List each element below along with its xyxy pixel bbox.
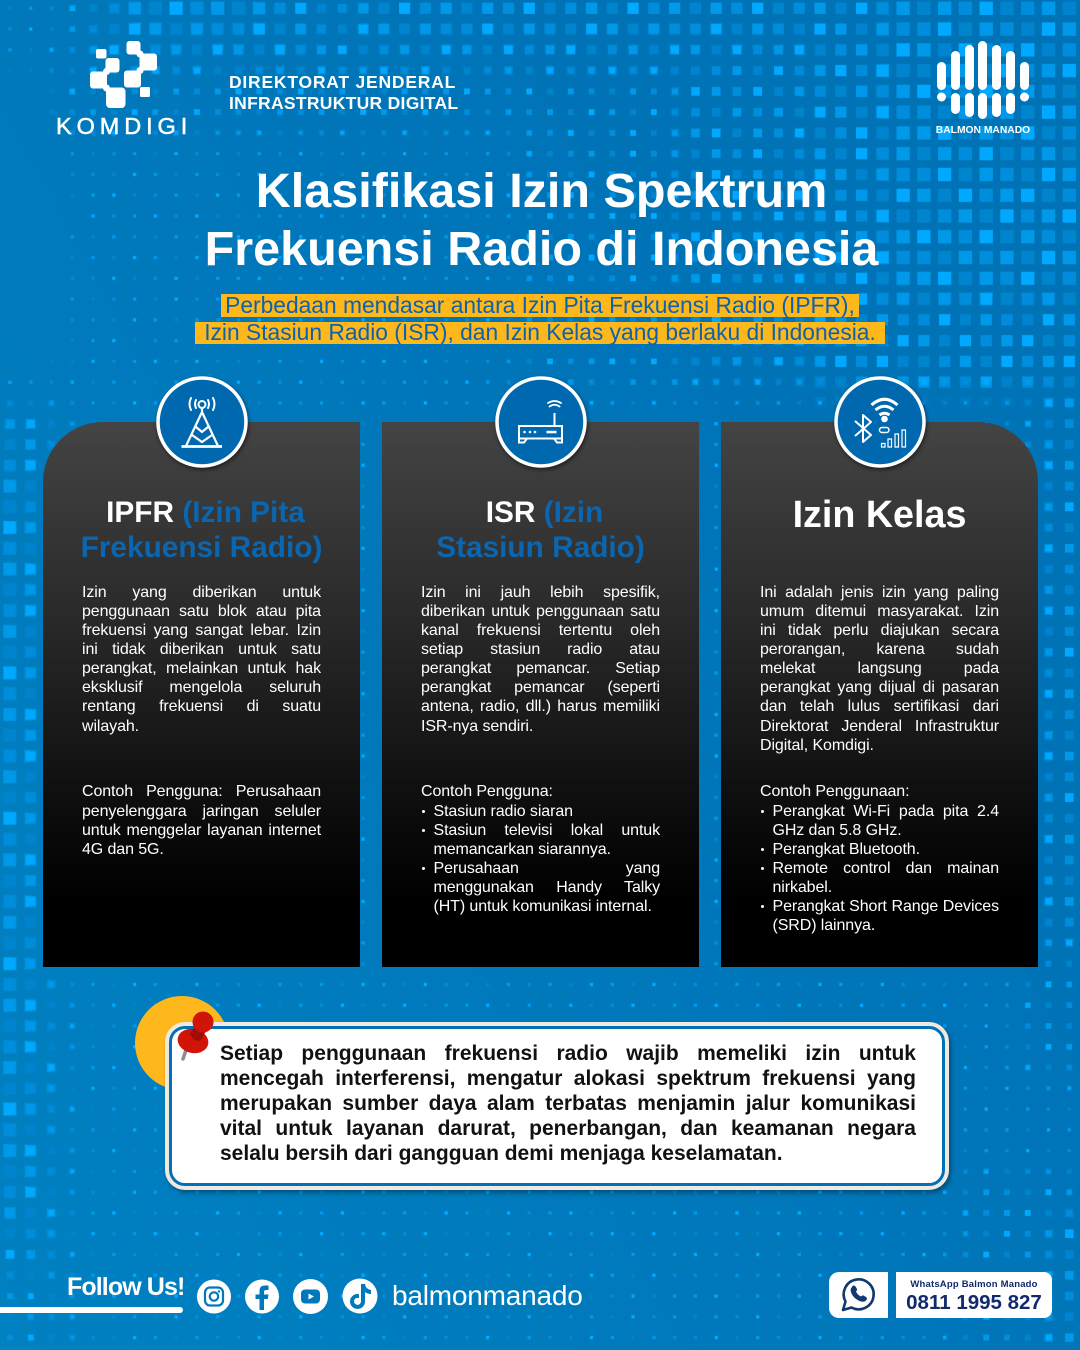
text: Izin Kelas usage	[760, 783, 999, 934]
text: Izin Kelas description: Digital, Komdigi.	[760, 737, 874, 754]
heading: IPFR	[81, 496, 322, 564]
text: ISR users: (HT) untuk komunikasi internal.	[434, 898, 652, 915]
text: ISR description: antena, radio, dll.) harus memiliki	[421, 698, 660, 715]
heading: ISR	[436, 496, 645, 564]
text: IPFR description	[82, 584, 322, 735]
text: Izin Kelas description: ini tidak perlu diajukan secara	[760, 622, 999, 639]
icon: tiktok	[342, 1278, 378, 1314]
decorative underline: follow us	[0, 1307, 183, 1313]
text: Izin Kelas usage: Contoh Penggunaan:	[760, 783, 909, 800]
title: Klasifikasi Izin Spektrum	[256, 164, 827, 218]
text: Izin Kelas usage: GHz dan 5.8 GHz.	[772, 822, 902, 839]
logo: Balmon Manado	[936, 41, 1030, 136]
text: Izin Kelas description: melekat langsung pada	[760, 660, 999, 677]
text: ISR users: memancarkan siarannya.	[434, 841, 611, 858]
panel: Izin Kelas	[721, 422, 1038, 967]
text: ISR users: Perusahaan yang	[434, 860, 660, 877]
text: Izin Kelas description: Ini adalah jenis izin yang paling	[760, 584, 999, 600]
text: ISR description: perangkat pemancar (seperti	[421, 679, 660, 696]
text: IPFR users: penyelenggara jaringan seluler	[82, 803, 321, 820]
text: IPFR description: ini tidak diberikan untuk satu	[82, 641, 321, 658]
panel: whatsapp contact: 0811 1995 827	[906, 1291, 1042, 1314]
icon: red push pin	[178, 1012, 214, 1061]
text: IPFR users: 4G dan 5G.	[82, 841, 164, 858]
text: ISR description: Izin ini jauh lebih spesifik,	[421, 584, 660, 600]
callout	[165, 1022, 949, 1190]
text: ISR users: Stasiun radio siaran	[434, 803, 573, 820]
callout: mencegah interferensi, mengatur alokasi spektrum frekuensi yang	[220, 1067, 916, 1090]
icon: whatsapp	[829, 1272, 888, 1318]
subtitle: Perbedaan mendasar antara Izin Pita Frekuensi Radio (IPFR),	[225, 292, 855, 318]
logo: Balmon Manado: BALMON MANADO	[936, 124, 1030, 136]
text: IPFR description: Izin yang diberikan untuk	[82, 584, 321, 600]
callout: Setiap penggunaan frekuensi radio wajib memeliki izin untuk	[220, 1042, 916, 1065]
callout: selalu bersih dari gangguan demi menjaga keselamatan.	[220, 1142, 783, 1165]
text: ISR users	[421, 783, 660, 915]
panel: whatsapp contact: WhatsApp Balmon Manado	[910, 1279, 1038, 1290]
subtitle: Izin Stasiun Radio (ISR), dan Izin Kelas yang berlaku di Indonesia.	[204, 319, 876, 345]
text: IPFR description: perangkat, melainkan untuk hak	[82, 660, 321, 677]
text: Izin Kelas usage: Remote control dan mainan	[772, 860, 999, 877]
text: ISR users: Stasiun televisi lokal untuk	[434, 822, 660, 839]
text: ISR description: diberikan untuk penggunaan satu	[421, 603, 660, 620]
agency name	[229, 72, 458, 112]
text: Izin Kelas description: umum ditemui masyarakat. Izin	[760, 603, 999, 620]
text: ISR description: perangkat pemancar. Setiap	[421, 660, 660, 677]
text: Izin Kelas description: Direktorat Jenderal Infrastruktur	[760, 718, 999, 735]
agency name: INFRASTRUKTUR DIGITAL	[229, 92, 458, 112]
text: Izin Kelas description: dan telah lulus sertifikasi dari	[760, 698, 999, 715]
icon: radio tower	[154, 376, 252, 471]
icon: facebook	[245, 1280, 279, 1314]
icon: wifi and bluetooth	[832, 376, 930, 471]
subtitle	[195, 292, 885, 345]
text: ISR description	[421, 584, 660, 735]
text: IPFR users: Contoh Pengguna: Perusahaan	[82, 783, 321, 800]
text: Izin Kelas usage: nirkabel.	[772, 879, 832, 896]
text: Izin Kelas usage: (SRD) lainnya.	[772, 917, 875, 934]
text: social handle: balmonmanado	[392, 1280, 583, 1311]
heading: ISR: Stasiun Radio)	[436, 531, 645, 564]
text: follow us: Follow Us!	[67, 1273, 184, 1301]
text: ISR description: setiap stasiun radio atau	[421, 641, 660, 658]
text: Izin Kelas usage: Perangkat Short Range Devices	[772, 898, 999, 915]
text: IPFR description: rentang frekuensi di suatu	[82, 698, 321, 715]
title: Frekuensi Radio di Indonesia	[205, 222, 878, 276]
heading: ISR: ISR (Izin	[486, 496, 603, 529]
icon: instagram	[197, 1280, 231, 1314]
heading: IPFR: IPFR (Izin Pita	[106, 496, 305, 529]
text: IPFR users: untuk menggelar layanan internet	[82, 822, 321, 839]
panel: IPFR	[43, 422, 360, 967]
logo: Komdigi	[56, 41, 192, 139]
text: Izin Kelas usage: Perangkat Wi-Fi pada pita 2.4	[772, 803, 999, 820]
agency name: DIREKTORAT JENDERAL	[229, 72, 456, 92]
icon: router	[494, 376, 590, 471]
text: IPFR description: frekuensi yang sangat lebar. Izin	[82, 622, 321, 639]
panel: ISR	[382, 422, 699, 967]
text: ISR users: menggunakan Handy Talky	[434, 879, 660, 896]
text: ISR users: Contoh Pengguna:	[421, 783, 553, 800]
panel: whatsapp contact	[896, 1272, 1052, 1318]
text: IPFR description: penggunaan satu blok atau pita	[82, 603, 321, 620]
heading: IPFR: Frekuensi Radio)	[81, 531, 322, 564]
text: Izin Kelas description: perorangan, karena sudah	[760, 641, 999, 658]
icon: youtube	[293, 1279, 328, 1314]
logo: Komdigi: KOMDIGI	[56, 113, 192, 139]
text: ISR description: kanal frekuensi tertentu oleh	[421, 622, 660, 639]
text: Izin Kelas usage: Perangkat Bluetooth.	[772, 841, 920, 858]
text: IPFR users	[82, 783, 321, 858]
text: IPFR description: wilayah.	[82, 718, 139, 735]
text: Izin Kelas description: perangkat yang dijual di pasaran	[760, 679, 999, 696]
heading: Izin Kelas: Izin Kelas	[793, 492, 966, 534]
text: IPFR description: eksklusif mengelola seluruh	[82, 679, 321, 696]
callout: vital untuk layanan darurat, penerbangan, dan keamanan negara	[220, 1117, 916, 1140]
decoration: yellow circle	[135, 996, 229, 1090]
text: Izin Kelas description	[760, 584, 1000, 754]
callout: merupakan sumber daya alam terbatas menjamin jalur komunikasi	[220, 1092, 916, 1115]
title	[205, 164, 879, 276]
text: ISR description: ISR-nya sendiri.	[421, 718, 533, 735]
